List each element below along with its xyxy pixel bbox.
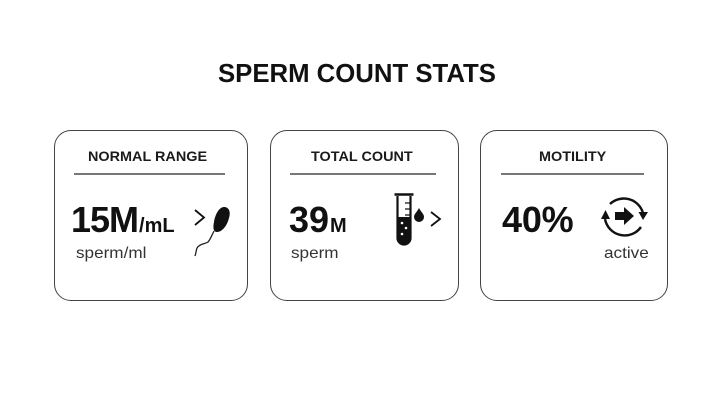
stat: 15M/mL: 15M/mL — [71, 199, 175, 240]
heading: normal range: NORMAL RANGE — [88, 148, 207, 164]
stat: 39M: 39M — [289, 199, 347, 240]
icon: greater than and sperm — [194, 207, 230, 256]
label: sperm: sperm — [291, 245, 339, 262]
panel: total count — [270, 130, 459, 301]
label: active: active — [604, 245, 649, 262]
panel: motility — [480, 130, 668, 301]
heading: motility: MOTILITY — [539, 148, 606, 164]
icon: test tube, drop and chevron — [394, 193, 442, 246]
icon: rotating arrows — [601, 197, 648, 237]
label: sperm/ml: sperm/ml — [76, 245, 146, 262]
heading: total count: TOTAL COUNT — [311, 148, 413, 164]
title: SPERM COUNT STATS — [218, 58, 496, 88]
stat: 40%: 40% — [502, 199, 573, 240]
panel: normal range — [54, 130, 248, 301]
